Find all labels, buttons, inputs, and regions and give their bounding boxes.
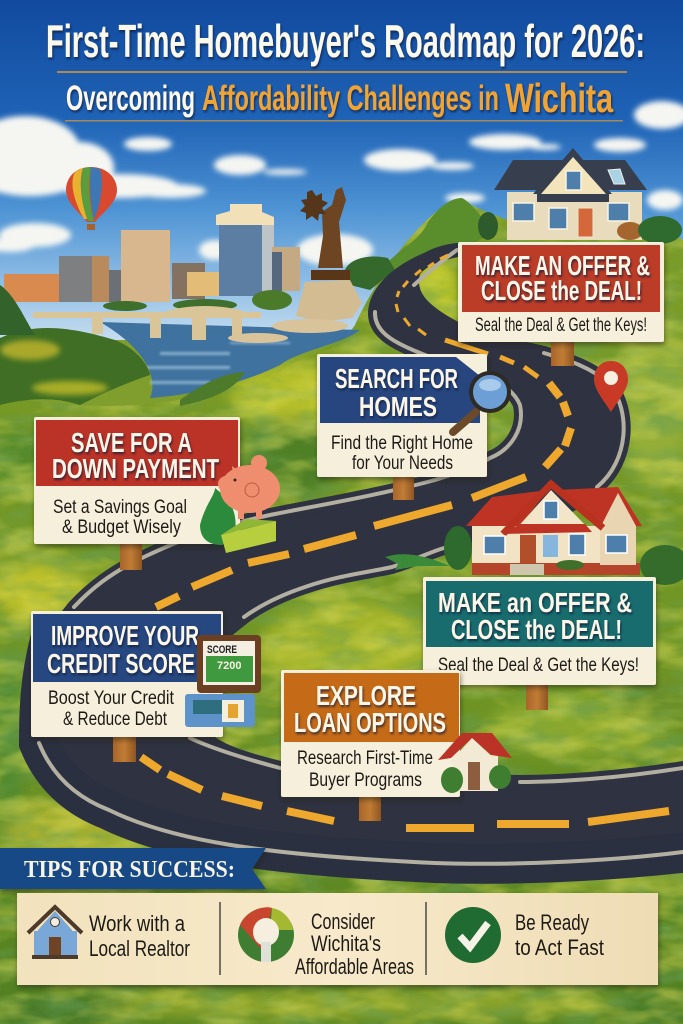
tree line <box>103 290 292 311</box>
sign: save for a down payment <box>34 417 280 570</box>
subtitle: Overcoming <box>66 79 195 118</box>
heading <box>47 620 199 679</box>
header <box>284 673 459 742</box>
board dividers <box>220 902 426 975</box>
icon: house <box>28 907 82 959</box>
subtext: Set a Savings Goal <box>53 497 187 518</box>
road centre dashes <box>141 255 669 828</box>
text: Affordable Areas <box>295 954 414 979</box>
icon: score clipboard: SCORE <box>207 644 237 656</box>
text <box>295 909 414 979</box>
text <box>515 910 604 960</box>
board <box>281 670 460 797</box>
text: Be Ready <box>515 910 589 935</box>
header <box>426 581 653 647</box>
clouds <box>0 101 683 266</box>
board <box>423 577 656 685</box>
icon: piggy bank <box>218 455 280 519</box>
subtext <box>48 688 175 730</box>
tips board <box>17 893 658 985</box>
heading: HOMES <box>359 391 437 422</box>
subtext: & Reduce Debt <box>63 709 168 730</box>
hot air balloon <box>66 167 117 230</box>
heading <box>335 363 458 422</box>
board <box>317 354 487 477</box>
heading: EXPLORE <box>316 680 416 711</box>
post <box>526 684 548 710</box>
text: Consider <box>311 909 375 934</box>
post <box>120 542 142 570</box>
subtext: Research First-Time <box>297 748 433 769</box>
heading <box>475 250 650 306</box>
text: Wichita's <box>311 931 381 956</box>
icon: magnifying glass <box>453 373 509 432</box>
trees at hill foot <box>345 256 395 290</box>
icon: small house <box>438 733 512 793</box>
heading <box>438 587 632 645</box>
Keeper of the Plains statue <box>296 187 362 322</box>
map pin <box>594 361 628 412</box>
subtitle: Affordability Challenges in <box>202 79 499 118</box>
board <box>31 611 223 737</box>
sign: improve your credit score <box>31 611 261 762</box>
icon: score clipboard: 7200 <box>217 660 241 672</box>
subtext: & Budget Wisely <box>62 517 181 538</box>
house at top of road <box>478 148 682 244</box>
green ribbon <box>385 554 450 570</box>
heading: CREDIT SCORE <box>47 648 195 679</box>
subtext: for Your Needs <box>352 453 453 474</box>
heading: DOWN PAYMENT <box>52 453 219 484</box>
icon: score clipboard <box>197 635 261 693</box>
board <box>34 417 240 544</box>
house at road bend <box>444 484 683 585</box>
tips heading: TIPS FOR SUCCESS: <box>24 857 235 883</box>
header <box>320 357 480 423</box>
river <box>100 322 360 398</box>
subtext <box>297 748 433 791</box>
subtext: Find the Right Home <box>331 433 473 454</box>
subtitle <box>66 75 614 121</box>
title rule <box>57 71 627 73</box>
river highlights <box>140 342 290 384</box>
text: Work with a <box>89 911 186 936</box>
post <box>393 476 414 500</box>
heading <box>52 427 219 484</box>
board <box>17 893 658 985</box>
text <box>89 911 190 961</box>
heading: SEARCH FOR <box>335 363 458 394</box>
heading: IMPROVE YOUR <box>51 620 199 651</box>
heading <box>294 680 446 738</box>
post <box>551 340 574 366</box>
sign: make an offer red <box>458 242 664 366</box>
header <box>36 420 238 486</box>
bushes beside house <box>388 198 495 282</box>
text: to Act Fast <box>515 935 604 960</box>
icon: cash stack <box>200 488 276 553</box>
subtitle rule <box>65 120 623 122</box>
heading: LOAN OPTIONS <box>294 707 446 738</box>
tip: consider wichita's affordable areas <box>238 907 414 979</box>
sky background <box>0 0 683 340</box>
rocks <box>228 319 348 343</box>
subtext: Seal the Deal & Get the Keys! <box>438 655 639 676</box>
subtext: Boost Your Credit <box>48 688 175 709</box>
text: Local Realtor <box>89 936 190 961</box>
sign: explore loan options <box>281 670 512 821</box>
winding road <box>39 250 683 864</box>
subtext <box>331 433 473 474</box>
subtitle: Wichita <box>505 75 614 121</box>
sign: search for homes <box>317 354 509 500</box>
icon: map circle <box>238 907 294 962</box>
hill colour patches <box>0 255 683 1024</box>
icon: check mark <box>445 907 501 963</box>
sign: make an offer teal <box>423 577 656 710</box>
board <box>458 242 664 342</box>
header <box>33 614 221 682</box>
heading: SAVE FOR A <box>71 427 192 458</box>
tips banner <box>0 848 266 889</box>
post <box>113 736 136 762</box>
post <box>359 796 381 821</box>
city skyline <box>4 204 300 302</box>
header <box>462 245 660 312</box>
bridge <box>33 306 261 340</box>
subtext: Buyer Programs <box>309 770 422 791</box>
icon: credit card <box>185 694 255 727</box>
tip: work with a local realtor <box>28 907 190 961</box>
subtext <box>53 497 187 538</box>
left bushes <box>0 285 245 406</box>
tip: be ready to act fast <box>445 907 604 963</box>
